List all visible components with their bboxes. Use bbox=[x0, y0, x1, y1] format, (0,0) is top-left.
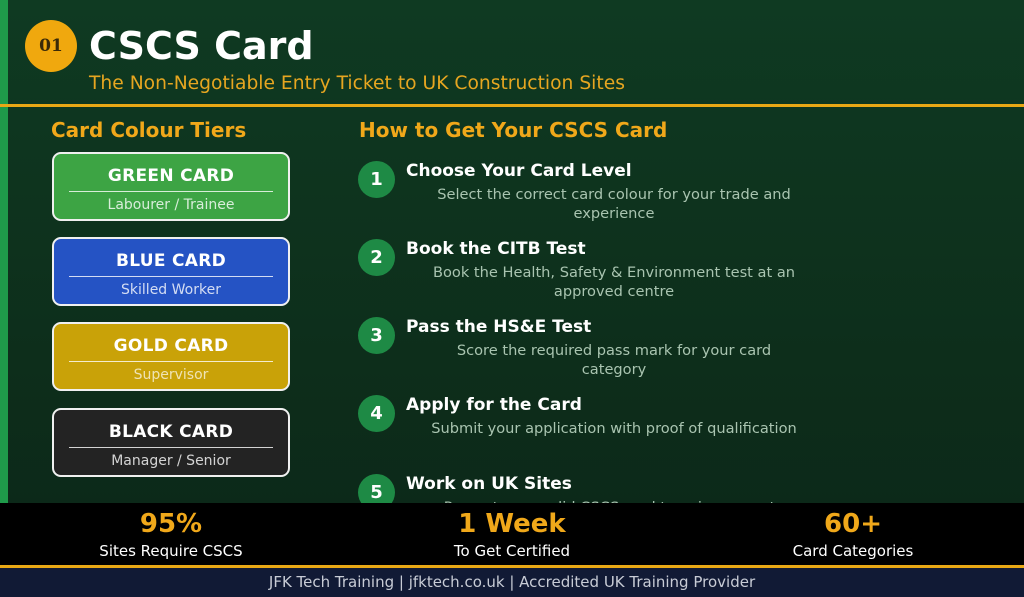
gold card bbox=[52, 322, 290, 391]
stat: 1 week bbox=[454, 509, 570, 560]
stat: 95%: 95% bbox=[140, 509, 202, 539]
green card: Labourer / Trainee bbox=[108, 197, 234, 213]
step 5: Work on UK Sites bbox=[406, 474, 572, 494]
step 3: Score the required pass mark for your card category bbox=[457, 342, 771, 378]
stat: 95% bbox=[99, 509, 243, 560]
step 2: 2 bbox=[370, 247, 383, 268]
number badge bbox=[25, 20, 77, 72]
step 1: Select the correct card colour for your trade and experience bbox=[437, 186, 791, 222]
footer: JFK Tech Training | jfktech.co.uk | Accredited UK Training Provider bbox=[269, 573, 755, 591]
step 5: Present your valid CSCS card to gain access to construction sites bbox=[444, 499, 784, 535]
blue card bbox=[52, 237, 290, 306]
step 2: Book the CITB Test bbox=[406, 239, 586, 259]
green card: GREEN CARD bbox=[108, 166, 234, 186]
step 1 bbox=[358, 161, 791, 222]
gold card: Supervisor bbox=[134, 367, 208, 383]
stat: 60+ bbox=[793, 509, 913, 560]
step 5: 5 bbox=[370, 482, 383, 503]
footer bbox=[0, 565, 1024, 597]
step 4: 4 bbox=[370, 403, 383, 424]
stat: 95%: Sites Require CSCS bbox=[99, 542, 243, 560]
step 4 bbox=[358, 395, 797, 437]
step 5 bbox=[358, 474, 784, 535]
step 3: 3 bbox=[370, 325, 383, 346]
stat: 60+: 60+ bbox=[824, 509, 882, 539]
stat: 1 week: To Get Certified bbox=[454, 542, 570, 560]
step 3: Pass the HS&E Test bbox=[406, 317, 591, 337]
subtitle: The Non-Negotiable Entry Ticket to UK Construction Sites bbox=[89, 73, 625, 94]
black card: BLACK CARD bbox=[109, 422, 233, 442]
title: CSCS Card bbox=[89, 24, 314, 68]
number badge: 01 bbox=[39, 36, 63, 56]
black card: Manager / Senior bbox=[111, 453, 231, 469]
heading: Card Colour Tiers bbox=[51, 118, 246, 142]
left accent stripe bbox=[0, 0, 8, 503]
step 2: Book the Health, Safety & Environment test at an approved centre bbox=[433, 264, 795, 300]
panel heading: how to get: How to Get Your CSCS Card bbox=[359, 118, 667, 142]
step 2 bbox=[358, 239, 795, 300]
step 1: 1 bbox=[370, 169, 383, 190]
stat: 60+: Card Categories bbox=[793, 542, 913, 560]
gold card: GOLD CARD bbox=[114, 336, 228, 356]
step 3 bbox=[358, 317, 771, 378]
header bbox=[25, 20, 625, 94]
green card bbox=[52, 152, 290, 221]
step 4: Apply for the Card bbox=[406, 395, 582, 415]
stats bar bbox=[0, 503, 1024, 565]
black card bbox=[52, 408, 290, 477]
blue card: BLUE CARD bbox=[116, 251, 226, 271]
blue card: Skilled Worker bbox=[121, 282, 221, 298]
step 4: Submit your application with proof of qualification bbox=[431, 420, 797, 437]
stat: 1 week: 1 Week bbox=[458, 509, 566, 539]
gold divider bbox=[0, 104, 1024, 107]
step 1: Choose Your Card Level bbox=[406, 161, 632, 181]
